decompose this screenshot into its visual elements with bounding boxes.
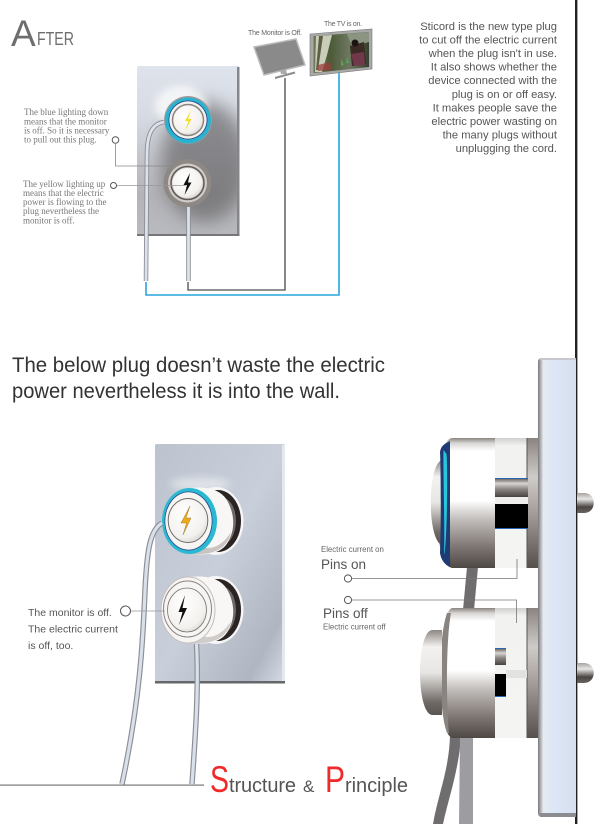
description text: when the plug isn't in use. bbox=[428, 48, 557, 60]
icon: black bolt bbox=[184, 173, 192, 195]
main statement heading: power nevertheless it is into the wall. bbox=[12, 380, 340, 403]
callout: yellow lighting: monitor is off. bbox=[23, 216, 75, 226]
main statement heading bbox=[12, 354, 385, 403]
description text: unplugging the cord. bbox=[456, 143, 557, 155]
large plug: off bbox=[161, 576, 244, 644]
callout: monitor is off bbox=[28, 606, 165, 652]
callout: pins off bbox=[323, 596, 516, 632]
wall plate with two plugs (top) bbox=[137, 66, 249, 236]
callout: pins off: Electric current off bbox=[323, 622, 387, 632]
side view: lower plug, pins off bbox=[420, 608, 538, 738]
callout: yellow lighting bbox=[23, 179, 186, 226]
pins off, cutaway bbox=[495, 648, 527, 697]
section title: Structure & Principle bbox=[210, 759, 408, 800]
blue light ring, side bbox=[440, 441, 450, 567]
title: After bbox=[11, 13, 74, 54]
section title: Structure & Principle: S bbox=[210, 759, 229, 800]
section title: Structure & Principle: tructure bbox=[229, 775, 296, 797]
wall plate with two plugs (large) bbox=[155, 444, 285, 684]
callout: pins on: Pins on bbox=[321, 557, 366, 572]
description text bbox=[419, 21, 558, 155]
side view: wall plate and pins bbox=[538, 358, 594, 817]
pins on, cutaway bbox=[495, 478, 528, 529]
button, side bbox=[431, 460, 442, 545]
main statement heading: The below plug doesn’t waste the electric bbox=[12, 354, 385, 377]
ring, side bbox=[440, 613, 451, 733]
plug: blue lit bbox=[164, 96, 212, 144]
callout: pins off: Pins off bbox=[323, 606, 368, 621]
monitor, off: The Monitor is Off. bbox=[248, 30, 302, 37]
callout: blue lighting bbox=[24, 107, 172, 166]
description text: It also shows whether the bbox=[431, 62, 557, 74]
description text: plug is on or off easy. bbox=[452, 89, 557, 101]
callout: blue lighting: means that the monitor bbox=[24, 116, 107, 126]
callout: blue lighting: is off. So it is necessary bbox=[24, 126, 110, 136]
description text: device connected with the bbox=[428, 75, 557, 87]
baseline rule bbox=[0, 784, 204, 786]
cords of upper plugs bbox=[146, 122, 188, 281]
title: After: A bbox=[11, 13, 36, 54]
TV, on: The TV is on. bbox=[324, 21, 362, 28]
pin lower bbox=[577, 663, 594, 683]
wiring: blue and grey cables to devices bbox=[146, 72, 339, 295]
callout: monitor is off: is off, too. bbox=[28, 640, 73, 652]
callout: yellow lighting: power is flowing to the bbox=[23, 197, 106, 207]
large plug: blue lit bbox=[162, 487, 244, 555]
description text: to cut off the electric current bbox=[419, 34, 558, 46]
callout: pins on: Electric current on bbox=[321, 545, 384, 554]
section title: Structure & Principle: rinciple bbox=[345, 775, 408, 797]
callout: yellow lighting: plug nevertheless the bbox=[23, 206, 99, 216]
description text: electric power wasting on bbox=[431, 116, 557, 128]
button, side bbox=[420, 630, 442, 715]
callout: monitor is off: The electric current bbox=[28, 624, 118, 636]
side view: upper plug, pins on bbox=[431, 438, 538, 568]
page divider line bbox=[575, 0, 577, 824]
description text: It makes people save the bbox=[433, 102, 557, 114]
callout: blue lighting: The blue lighting down bbox=[24, 107, 109, 117]
callout: monitor is off: The monitor is off. bbox=[28, 607, 112, 619]
large cords bbox=[122, 523, 197, 784]
TV, on bbox=[310, 21, 372, 76]
callout: yellow lighting: means that the electric bbox=[23, 188, 104, 198]
icon: black bolt bbox=[178, 595, 187, 625]
callout: pins on bbox=[321, 545, 517, 582]
description text: the many plugs without bbox=[443, 130, 558, 142]
description text: Sticord is the new type plug bbox=[420, 21, 557, 33]
pin upper bbox=[577, 493, 594, 513]
callout: yellow lighting: The yellow lighting up bbox=[23, 179, 106, 189]
section title: Structure & Principle: P bbox=[325, 759, 345, 800]
icon: yellow bolt bbox=[185, 110, 192, 131]
monitor, off bbox=[248, 30, 305, 78]
callout: blue lighting: to pull out this plug. bbox=[24, 134, 97, 144]
title: After: FTER bbox=[37, 28, 74, 49]
section title: Structure & Principle: & bbox=[303, 777, 315, 796]
side view: cords bbox=[433, 567, 478, 824]
icon: orange bolt bbox=[181, 506, 191, 535]
plug: yellow indicator bbox=[164, 159, 212, 207]
